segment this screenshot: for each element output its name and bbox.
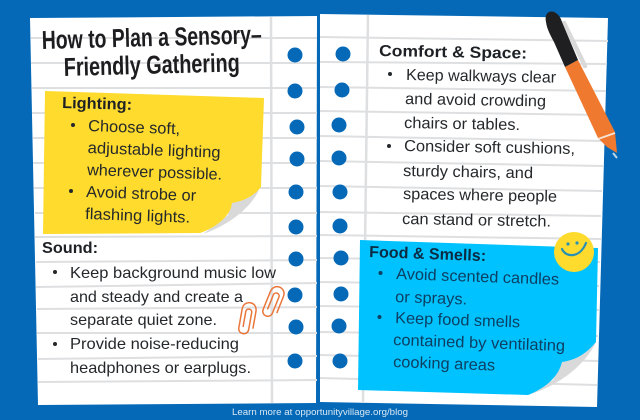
panel: food and smells sticky note (358, 232, 598, 395)
title (41, 19, 262, 82)
title: Friendly Gathering (63, 47, 240, 82)
heading: sound: Sound: (42, 240, 98, 257)
list: sound tips: separate quiet zone. (70, 312, 217, 329)
list: food tips: Avoid scented candles (396, 266, 559, 289)
list: sound tips: headphones or earplugs. (70, 360, 251, 377)
list: sound tips (53, 265, 276, 377)
icon: paperclips (238, 285, 286, 335)
list: lighting tips (69, 118, 222, 227)
list: comfort tips: sturdy chairs, and (403, 163, 533, 182)
list: food tips: cooking areas (393, 354, 495, 375)
list: food tips: Keep food smells (395, 310, 520, 331)
list: comfort tips: chairs or tables. (404, 115, 520, 134)
list: sound tips: Keep background music low (70, 265, 276, 282)
list: food tips: or sprays. (395, 289, 467, 309)
list: comfort tips: spaces where people (403, 186, 557, 206)
list: comfort tips: Consider soft cushions, (404, 138, 575, 158)
list: comfort tips: Keep walkways clear (406, 67, 557, 87)
title: How to Plan a Sensory– (41, 19, 262, 55)
icon: pen (546, 12, 617, 158)
list: lighting tips: Avoid strobe or (86, 184, 197, 205)
heading: comfort and space: Comfort & Space: (379, 43, 527, 63)
list: food tips (378, 266, 565, 375)
panel: lighting sticky note (43, 91, 264, 234)
list: sound tips: Provide noise-reducing (70, 336, 239, 353)
list: comfort tips (387, 67, 575, 231)
list: comfort tips: can stand or stretch. (402, 211, 551, 231)
footer link text: Learn more at opportunityvillage.org/blog (232, 407, 408, 418)
list: lighting tips: wherever possible. (86, 162, 222, 184)
list: sound tips: and steady and create a (70, 289, 243, 306)
panel: comfort and space section (379, 43, 575, 231)
heading: lighting: Lighting: (62, 95, 132, 114)
panel: sound section (42, 240, 276, 377)
list: food tips: contained by ventilating (393, 332, 565, 355)
panel: left notebook page (30, 16, 317, 405)
list: lighting tips: adjustable lighting (87, 140, 221, 162)
list: comfort tips: and avoid crowding (405, 91, 546, 110)
icon: smiley (554, 232, 594, 272)
panel: right notebook page (320, 14, 608, 407)
list: lighting tips: Choose soft, (88, 118, 180, 138)
list: lighting tips: flashing lights. (85, 206, 190, 227)
heading: food and smells: Food & Smells: (369, 244, 486, 265)
